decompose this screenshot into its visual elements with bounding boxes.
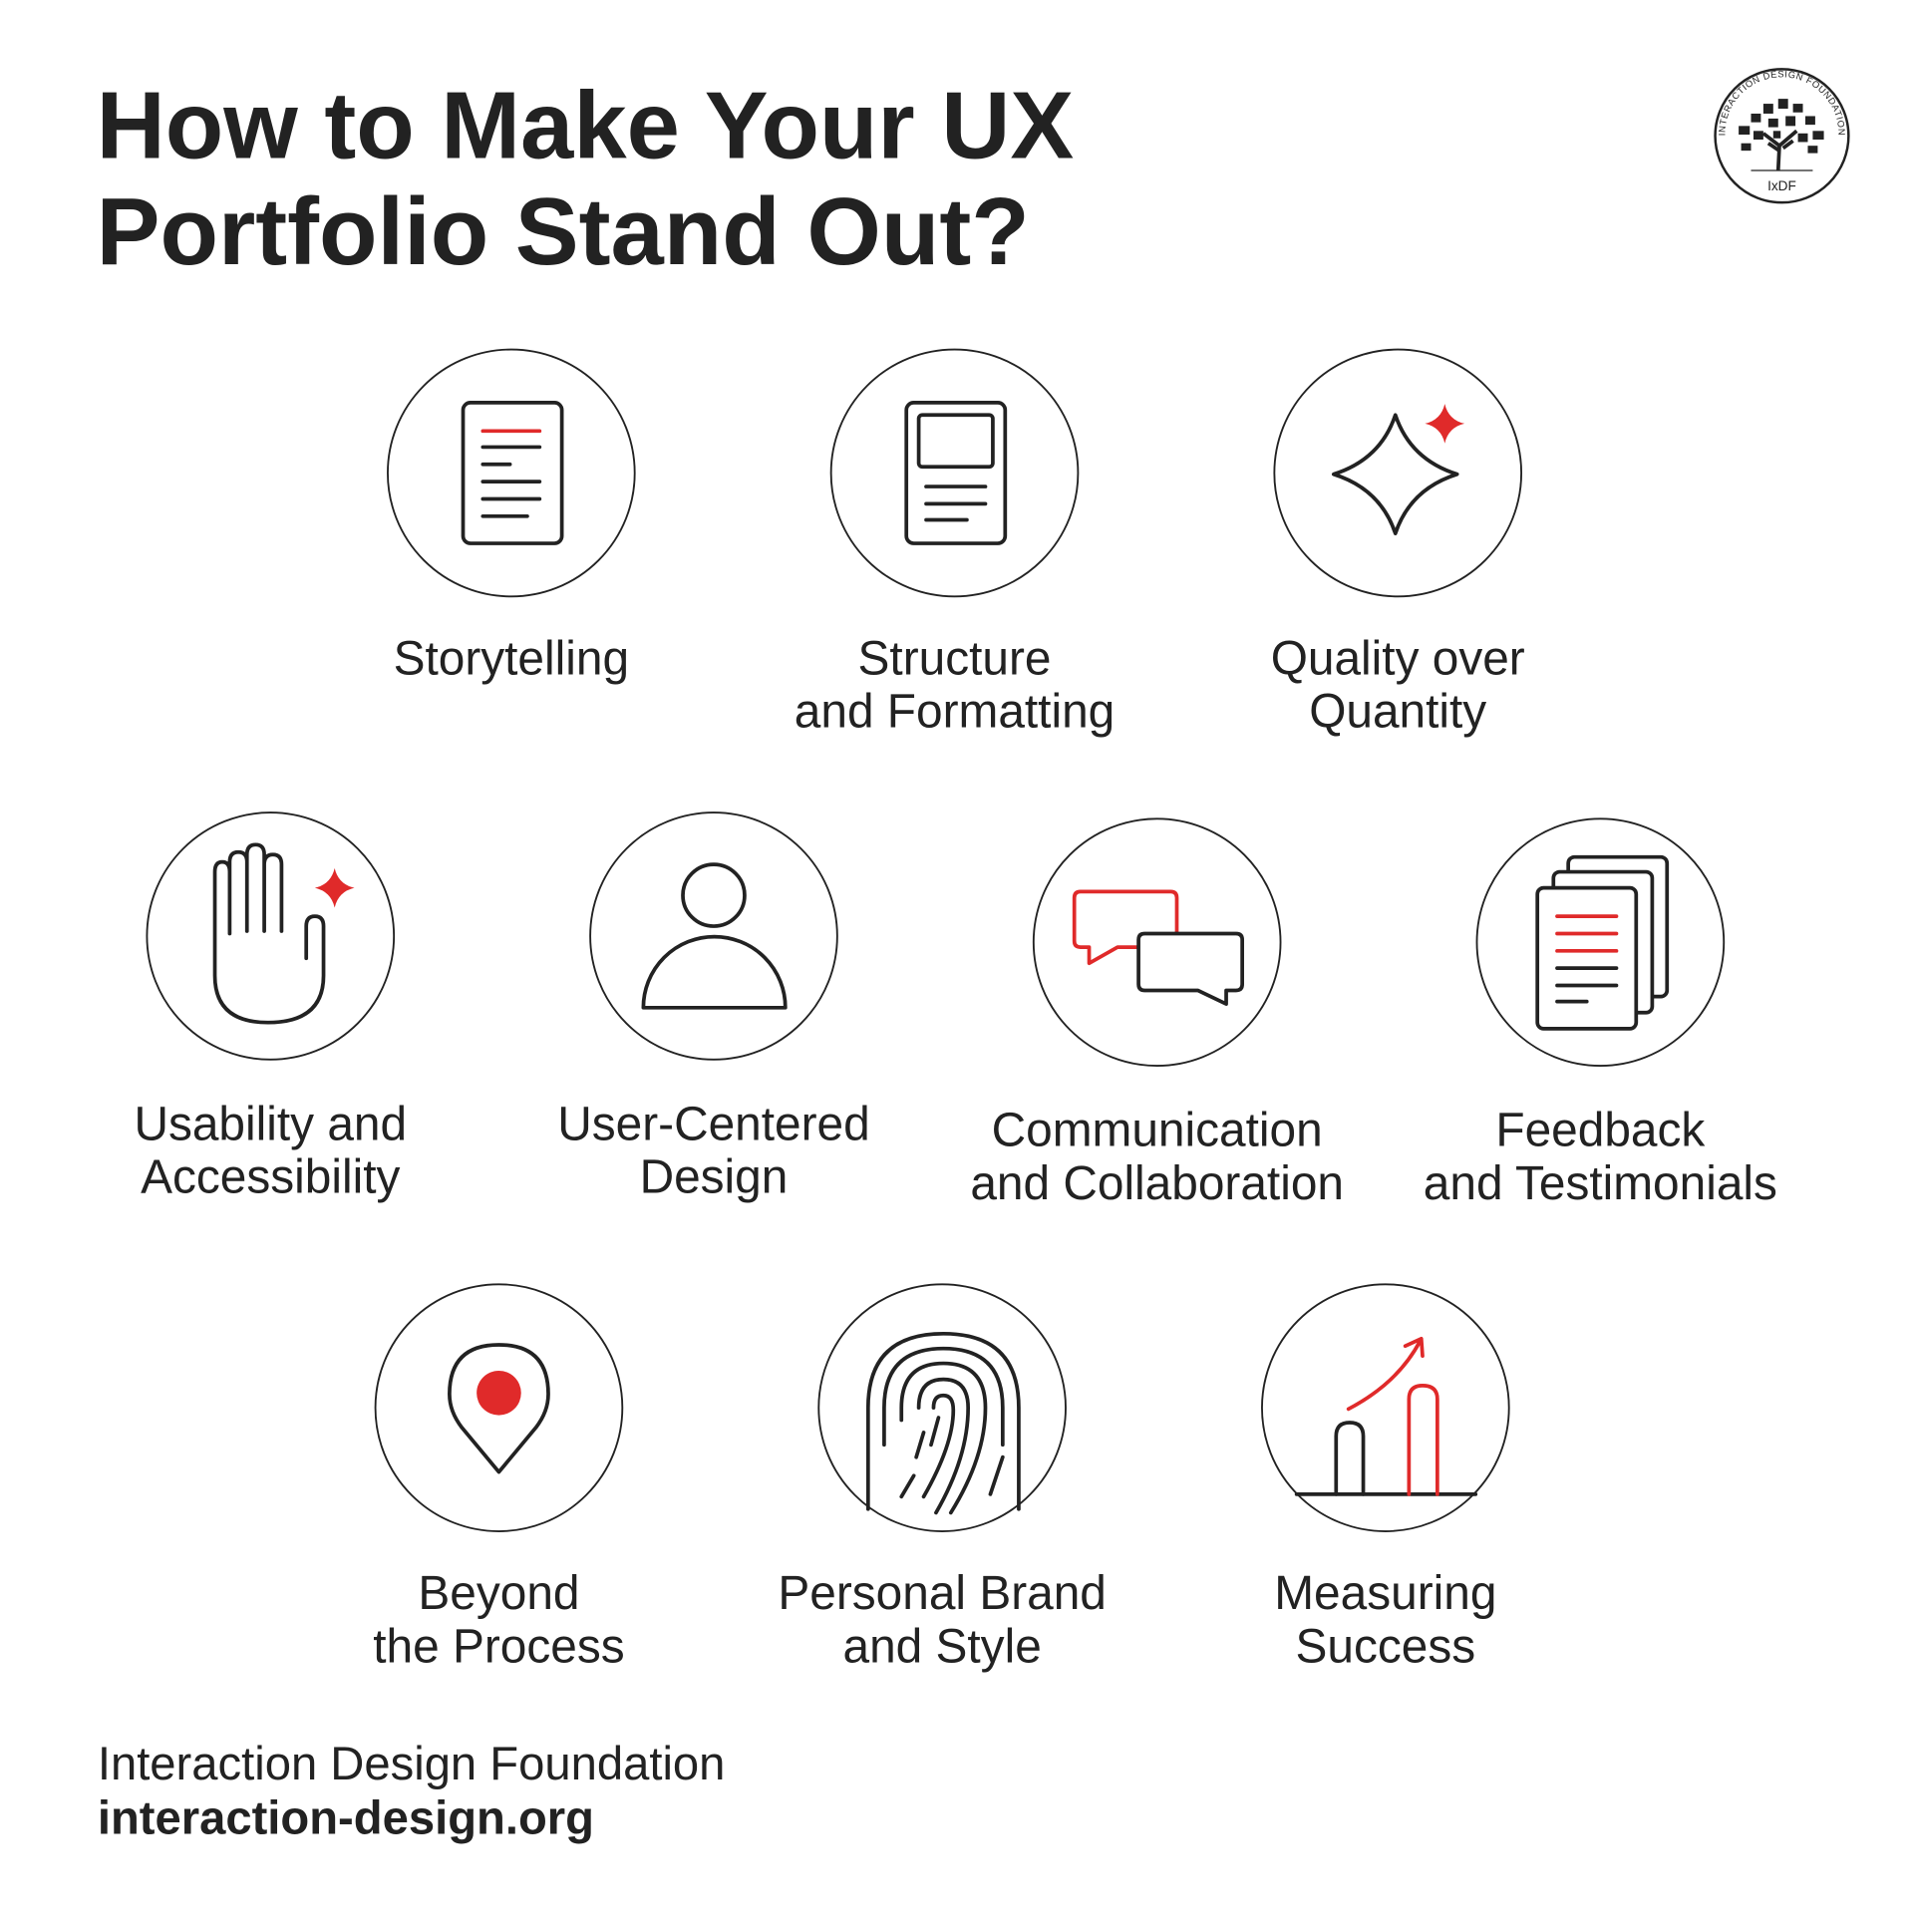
item: Beyond the Process: the Process	[373, 1620, 625, 1673]
icon: sparkle	[1334, 404, 1464, 533]
footer: Interaction Design Foundation	[98, 1738, 725, 1790]
icon: location pin	[450, 1345, 548, 1472]
item: Beyond the Process: Beyond	[418, 1567, 579, 1620]
item: Personal Brand and Style: Personal Brand	[778, 1567, 1107, 1620]
logo: IxDF	[1714, 68, 1850, 203]
title: Portfolio Stand Out?	[97, 178, 1030, 285]
item: Personal Brand and Style: and Style	[842, 1620, 1042, 1673]
item: Storytelling	[388, 350, 635, 685]
item: Measuring Success: Success	[1296, 1620, 1475, 1673]
logo: IxDF: INTERACTION DESIGN FOUNDATION	[1719, 70, 1845, 136]
item: Measuring Success	[1262, 1284, 1509, 1673]
icon: layout doc	[906, 403, 1005, 543]
item: Feedback and Testimonials	[1424, 818, 1777, 1210]
icon: chat bubbles	[1075, 891, 1242, 1004]
item: Quality over Quantity	[1271, 350, 1525, 739]
item: Structure and Formatting: and Formatting	[795, 686, 1115, 739]
item: Communication and Collaboration	[970, 818, 1344, 1210]
item: User-Centered Design: User-Centered	[557, 1098, 870, 1150]
item: Usability and Accessibility	[134, 812, 407, 1204]
logo: IxDF: IxDF	[1767, 178, 1796, 193]
item: Beyond the Process	[373, 1284, 625, 1673]
item: Usability and Accessibility: Usability and	[134, 1098, 407, 1150]
item: Quality over Quantity: Quantity	[1309, 686, 1486, 739]
title: How to Make Your UX	[97, 73, 1074, 179]
footer	[98, 1738, 725, 1845]
item: Quality over Quantity: Quality over	[1271, 632, 1525, 685]
icon: growth chart	[1297, 1339, 1475, 1494]
icon: hand	[215, 844, 355, 1023]
item: Structure and Formatting	[795, 350, 1115, 739]
icon: fingerprint	[868, 1334, 1019, 1512]
footer: interaction-design.org	[98, 1792, 594, 1845]
item: Usability and Accessibility: Accessibility	[141, 1151, 401, 1204]
title	[97, 73, 1074, 285]
item: Feedback and Testimonials: Feedback	[1495, 1105, 1705, 1157]
item: User-Centered Design: Design	[640, 1151, 788, 1204]
item: Feedback and Testimonials: and Testimonials	[1424, 1157, 1777, 1210]
item: Storytelling: Storytelling	[394, 632, 629, 685]
item: Communication and Collaboration: Communication	[992, 1105, 1323, 1157]
icon: document	[464, 403, 562, 543]
icon: stacked documents	[1537, 857, 1667, 1029]
item: Structure and Formatting: Structure	[858, 632, 1051, 685]
icon: user	[643, 864, 786, 1008]
item: Personal Brand and Style	[778, 1284, 1107, 1673]
item: User-Centered Design	[557, 812, 870, 1204]
item: Communication and Collaboration: and Collaboration	[970, 1157, 1344, 1210]
item: Measuring Success: Measuring	[1274, 1567, 1496, 1620]
